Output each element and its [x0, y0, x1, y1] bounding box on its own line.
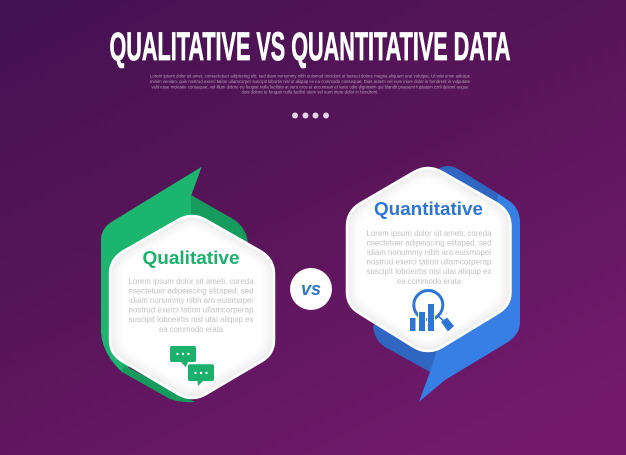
vs badge: [290, 268, 332, 310]
intro paragraph: velit esse molestie consequat, vel illum dolore eu feugiat nulla facilisis at vero eros et accumsan et iusto odio dignissim qui blandit praesent luptatum zzril delenit augue: [152, 84, 469, 90]
body text: nsectetuer adipeiscing elitaped, sed: [128, 286, 254, 296]
body text: idiam nonummy nibh aro euismopei: [367, 247, 491, 257]
intro paragraph: duis dolore te feugait nulla facilisi utem vel eum iriure dolor in hendrerit.: [242, 90, 378, 96]
intro paragraph: minim veniam, quis nostrud exerci tation ullamcorper suscipit lobortis nisl ut aliquip ex ea commodo consequat. Duis autem vel eum iriure dolor in hendrerit in vulputate: [150, 79, 470, 85]
green back shape: [180, 195, 248, 300]
pagination dots: [292, 112, 329, 118]
blue back shape: [373, 166, 505, 372]
panel: quantitative: [347, 166, 520, 402]
icon: chat bubbles: [170, 346, 214, 386]
body text: nostrud exerci tation ullamcorperap: [366, 256, 492, 266]
icon: magnifier over bars: [410, 290, 454, 332]
body text: [128, 276, 254, 334]
body text: Lorem ipsum dolor sit ameti, coreda: [366, 228, 492, 238]
intro paragraph: [150, 74, 470, 96]
blue speech shape: [419, 194, 520, 402]
green speech shape: [101, 167, 202, 373]
body text: idiam nonummy nibh aro euismopei: [129, 295, 253, 305]
body text: Lorem ipsum dolor sit ameti, coreda: [128, 276, 254, 286]
white hexagon card: [347, 168, 510, 351]
body text: nostrud exerci tation ullamcorperap: [128, 304, 254, 314]
body text: suscipit loboeirtis nisl utai aliquip ex: [366, 266, 492, 276]
heading: qualitative: Qualitative: [142, 248, 240, 268]
body text: ea commodo erata: [159, 324, 223, 334]
body text: nsectetuer adipeiscing elitaped, sed: [366, 238, 492, 248]
panel: qualitative: [101, 167, 274, 402]
heading: quantitative: Quantitative: [374, 199, 483, 219]
white hexagon card: [110, 216, 274, 398]
vs badge: vs: [301, 279, 321, 299]
body text: suscipit loboeirtis nisl utai aliquip ex: [128, 314, 254, 324]
green lower fold: [122, 365, 195, 402]
body text: ea commodo erata: [397, 276, 461, 286]
body text: [366, 228, 492, 286]
intro paragraph: Lorem ipsum dolor sit amet, consectetuer adipiscing elit, sed diam nonummy nibh euismod tincidunt ut laoreet dolore magna aliquam erat volutpat. Ut wisi enim adeope: [150, 74, 470, 80]
